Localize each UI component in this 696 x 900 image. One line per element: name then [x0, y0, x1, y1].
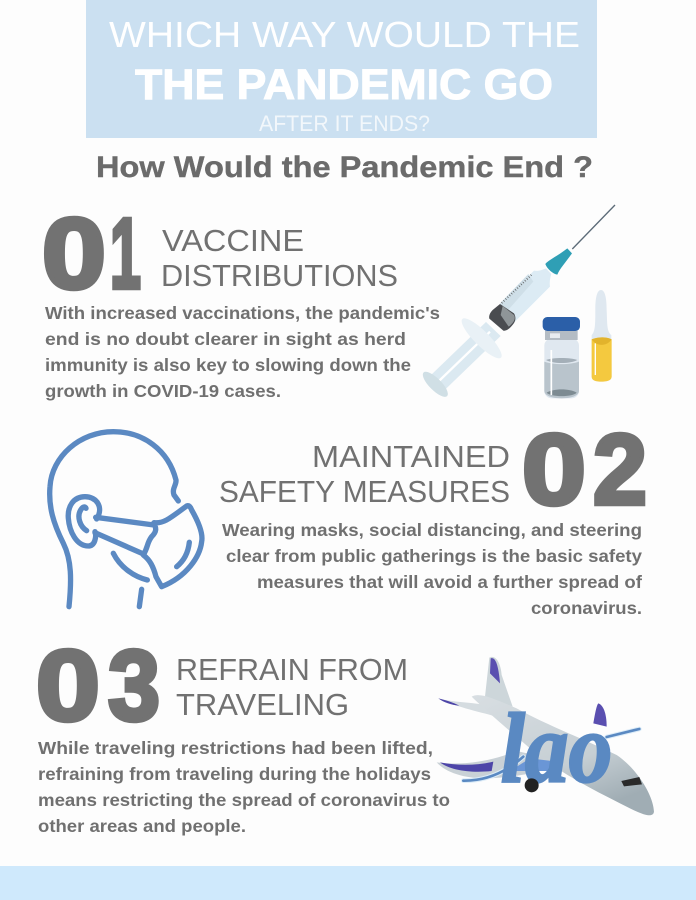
text block 02: measures that will avoid a further spread of [257, 572, 642, 592]
section 02: maintained safety measures [50, 414, 647, 618]
text block 01 [45, 303, 440, 401]
number 01 [42, 198, 141, 310]
number 02 [522, 414, 647, 526]
icon: head with mask [50, 432, 202, 607]
text block 03: other areas and people. [38, 816, 246, 836]
title banner: WHICH WAY WOULD THE [109, 14, 580, 55]
text block 03 [38, 738, 450, 836]
heading 01: VACCINE [162, 224, 304, 258]
heading 01 [161, 224, 398, 293]
heading 02: MAINTAINED [312, 440, 510, 474]
heading 03: TRAVELING [176, 688, 349, 722]
footer band [0, 866, 696, 900]
heading 02 [219, 440, 510, 509]
heading: How Would the Pandemic End ? [96, 151, 593, 184]
text block 01: end is no doubt clearer in sight as herd [45, 329, 406, 349]
text block 01: growth in COVID-19 cases. [45, 381, 281, 401]
text block 03: While traveling restrictions had been lifted, [38, 738, 433, 758]
text block 03: means restricting the spread of coronavirus to [38, 790, 450, 810]
number 03: 3 [108, 630, 160, 742]
number 02: 2 [593, 414, 647, 526]
icon: airplane with script lettering [437, 657, 654, 815]
heading 02: SAFETY MEASURES [219, 475, 510, 509]
number 01: 0 [42, 198, 106, 310]
text block 01: With increased vaccinations, the pandemic's [45, 303, 440, 323]
text block 03: refraining from traveling during the holidays [38, 764, 431, 784]
number 01: 1 [110, 198, 141, 310]
heading 03 [176, 653, 408, 722]
text block 02: coronavirus. [531, 598, 642, 618]
number 02: 0 [522, 414, 586, 526]
icon: syringe and vials [419, 205, 615, 400]
title banner: THE PANDEMIC GO [135, 61, 553, 109]
text block 02 [222, 520, 642, 618]
text block 02: Wearing masks, social distancing, and steering [222, 520, 642, 540]
number 03: 0 [36, 630, 100, 742]
heading 03: REFRAIN FROM [176, 653, 408, 687]
title banner: AFTER IT ENDS? [259, 111, 430, 136]
section 01: vaccine distributions [42, 198, 615, 401]
number 03 [36, 630, 160, 742]
heading 01: DISTRIBUTIONS [161, 259, 398, 293]
title banner [86, 0, 597, 138]
text block 01: immunity is also key to slowing down the [45, 355, 411, 375]
icon: airplane with script lettering: lao [501, 693, 612, 804]
section 03: refrain from traveling [36, 630, 654, 836]
text block 02: clear from public gatherings is the basic safety [226, 546, 642, 566]
